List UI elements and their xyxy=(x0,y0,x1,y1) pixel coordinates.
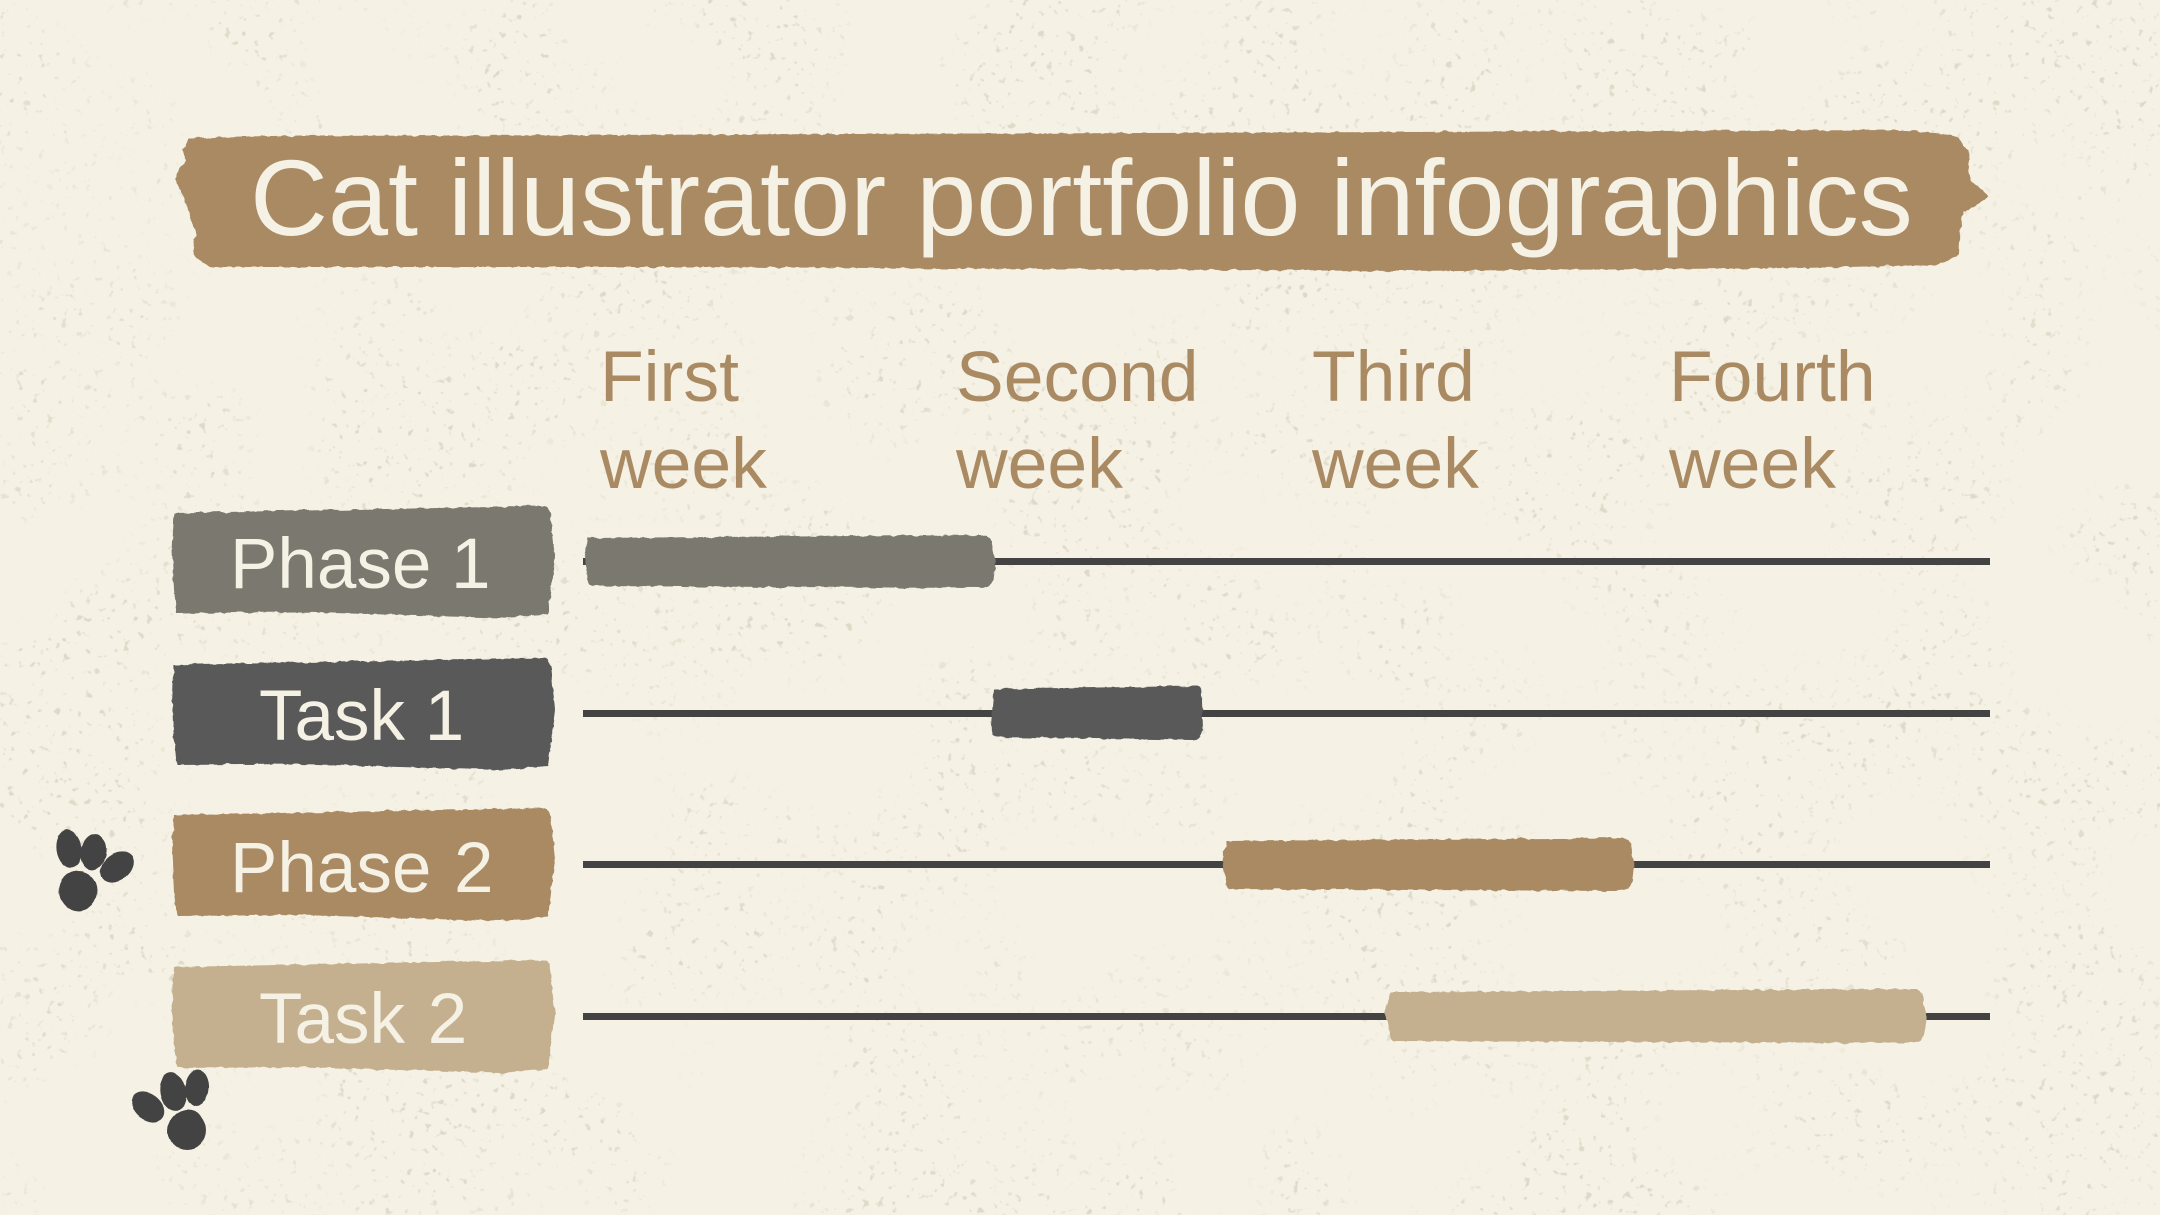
Phase 2 bar xyxy=(1222,838,1634,891)
first week header: First xyxy=(600,337,739,417)
icon: paw print lower xyxy=(126,1069,211,1150)
Task 2 label text: Task 2 xyxy=(259,980,467,1059)
Phase 1 label xyxy=(172,506,555,618)
icon: paw print upper xyxy=(54,828,139,911)
row: Task 1 xyxy=(172,658,1203,770)
week headers xyxy=(599,337,1876,504)
fourth week header: week xyxy=(1668,424,1836,504)
title text: Cat illustrator portfolio infographics xyxy=(250,137,1913,258)
Task 1 bar xyxy=(991,686,1203,740)
row: Phase 1 xyxy=(172,506,995,618)
first week header: week xyxy=(599,424,767,504)
Task 2 bar xyxy=(1385,989,1927,1043)
title brush shape xyxy=(174,130,1990,271)
Phase 2 label text: Phase 2 xyxy=(230,829,494,908)
second week header: week xyxy=(955,424,1123,504)
second week header: Second xyxy=(956,337,1198,417)
Phase 1 label text: Phase 1 xyxy=(230,525,491,604)
Task 1 label text: Task 1 xyxy=(259,677,464,756)
fourth week header: Fourth xyxy=(1669,337,1876,417)
third week header: Third xyxy=(1312,337,1475,417)
Task 1 label xyxy=(172,658,555,770)
row: Task 2 xyxy=(172,960,1927,1073)
Phase 1 bar xyxy=(584,535,995,588)
title banner xyxy=(174,130,1990,271)
timeline lines xyxy=(583,558,1990,1020)
third week header: week xyxy=(1311,424,1479,504)
row: Phase 2 xyxy=(172,808,1634,921)
Phase 2 label xyxy=(172,808,555,921)
Task 2 label xyxy=(172,960,555,1073)
